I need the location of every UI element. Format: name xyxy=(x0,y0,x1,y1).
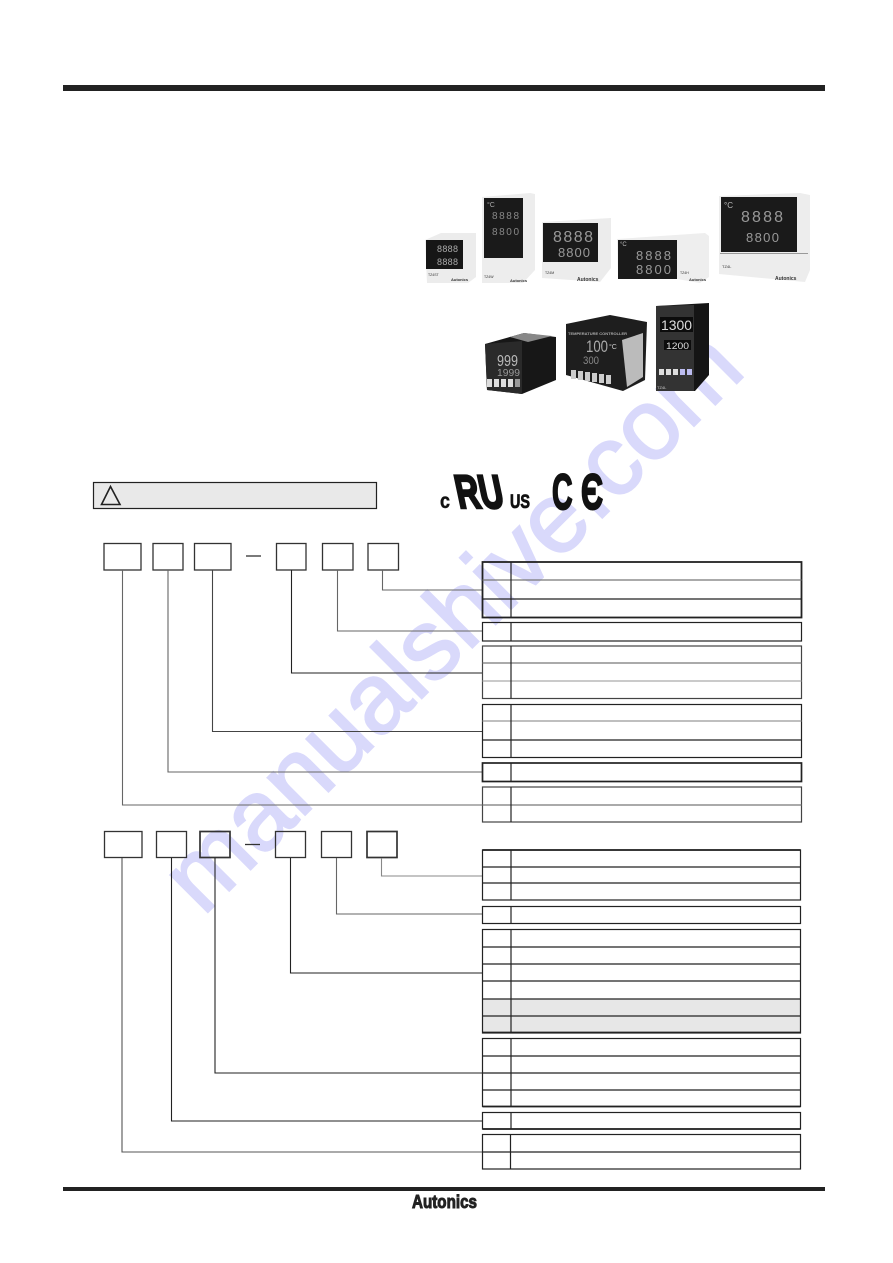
code diagram 1 selector boxes xyxy=(104,544,398,570)
certification: CE mark: C xyxy=(552,464,573,520)
product: tall black controller xyxy=(656,303,709,391)
product: horizontal white controller: Autonics xyxy=(689,277,707,282)
product: medium white controller: Autonics xyxy=(577,277,599,283)
product: tall white controller: °C xyxy=(487,201,495,209)
table 1: group E xyxy=(482,763,802,782)
footer brand: Autonics: Autonics xyxy=(412,1192,477,1212)
table 1: group B xyxy=(482,622,802,641)
icon: warning triangle xyxy=(102,486,120,504)
product: tall white controller: 8888 xyxy=(492,211,519,222)
product: small white controller: 8888 xyxy=(437,244,458,254)
product: large white controller: 8888 xyxy=(741,209,783,226)
certification: cUL us mark: RU xyxy=(450,466,508,519)
shaded rows xyxy=(482,999,800,1033)
product: large white controller: °C xyxy=(724,201,733,210)
certification: CE mark xyxy=(552,463,603,520)
product: horizontal white controller: °C xyxy=(620,242,627,248)
certification: cUL us mark: US xyxy=(510,492,530,513)
product: large white controller: TZ4L xyxy=(722,264,732,269)
code diagram 2 connector lines xyxy=(122,858,482,1152)
product: medium white controller: 8800 xyxy=(558,245,590,260)
product: small black controller xyxy=(485,333,556,394)
product: small black controller: 1999 xyxy=(497,368,520,379)
product: small black controller: 999 xyxy=(497,353,518,370)
footer bar xyxy=(63,1187,825,1191)
code diagram 2 selector boxes xyxy=(104,832,397,858)
product: tall white controller: 8800 xyxy=(492,227,519,238)
product: tall white controller: TZ4W xyxy=(484,275,494,279)
product photos xyxy=(425,193,810,394)
product: tall white controller xyxy=(482,193,535,283)
table 1: group F xyxy=(482,787,802,822)
product: small white controller: TZ4ST xyxy=(428,273,440,277)
product: large white controller xyxy=(719,193,810,282)
product: horizontal white controller xyxy=(617,233,709,283)
caution notice box xyxy=(94,482,376,508)
product: tall black controller: TZ4L xyxy=(657,385,667,390)
table 2: group B xyxy=(482,906,800,924)
product: tall white controller: Autonics xyxy=(510,278,528,283)
table 2: group A xyxy=(482,850,800,900)
table 2: group C xyxy=(482,930,800,1033)
top header bar xyxy=(63,85,825,91)
product: horizontal white controller: TZ4H xyxy=(680,271,689,275)
certification: CE mark: Є xyxy=(581,463,603,520)
table 1: group D xyxy=(482,704,802,758)
product: small white controller: 8888 xyxy=(437,257,458,267)
product: small white controller: Autonics xyxy=(451,277,469,282)
product: large white controller: 8800 xyxy=(746,230,779,245)
table 1: group C xyxy=(482,646,802,698)
product: square black controller xyxy=(566,315,647,391)
table 2: group D xyxy=(482,1038,800,1107)
product: small white controller xyxy=(425,233,476,283)
product: large white controller: Autonics xyxy=(775,276,797,282)
code diagram 1 connector lines xyxy=(122,570,482,805)
product: horizontal white controller: 8888 xyxy=(636,248,671,263)
product: horizontal white controller: 8800 xyxy=(636,262,671,277)
product: medium white controller xyxy=(542,218,611,283)
product: medium white controller: 8888 xyxy=(553,229,593,246)
product: tall black controller: 1300 xyxy=(661,317,692,333)
product: square black controller: °C xyxy=(609,343,617,351)
product: tall black controller: 1200 xyxy=(666,341,689,351)
product: square black controller: 300 xyxy=(583,355,599,367)
product: square black controller: TEMPERATURE CONTROLLER xyxy=(568,331,627,336)
watermark: manualshive.com: manualshive.com xyxy=(139,309,763,933)
product: square black controller: 100 xyxy=(586,337,608,356)
certification: cUL us mark: c xyxy=(440,490,450,513)
table 1: group A xyxy=(482,562,802,618)
table 2: group E xyxy=(482,1112,800,1129)
table 2: group F xyxy=(482,1134,800,1169)
product: medium white controller: TZ4M xyxy=(545,271,554,275)
